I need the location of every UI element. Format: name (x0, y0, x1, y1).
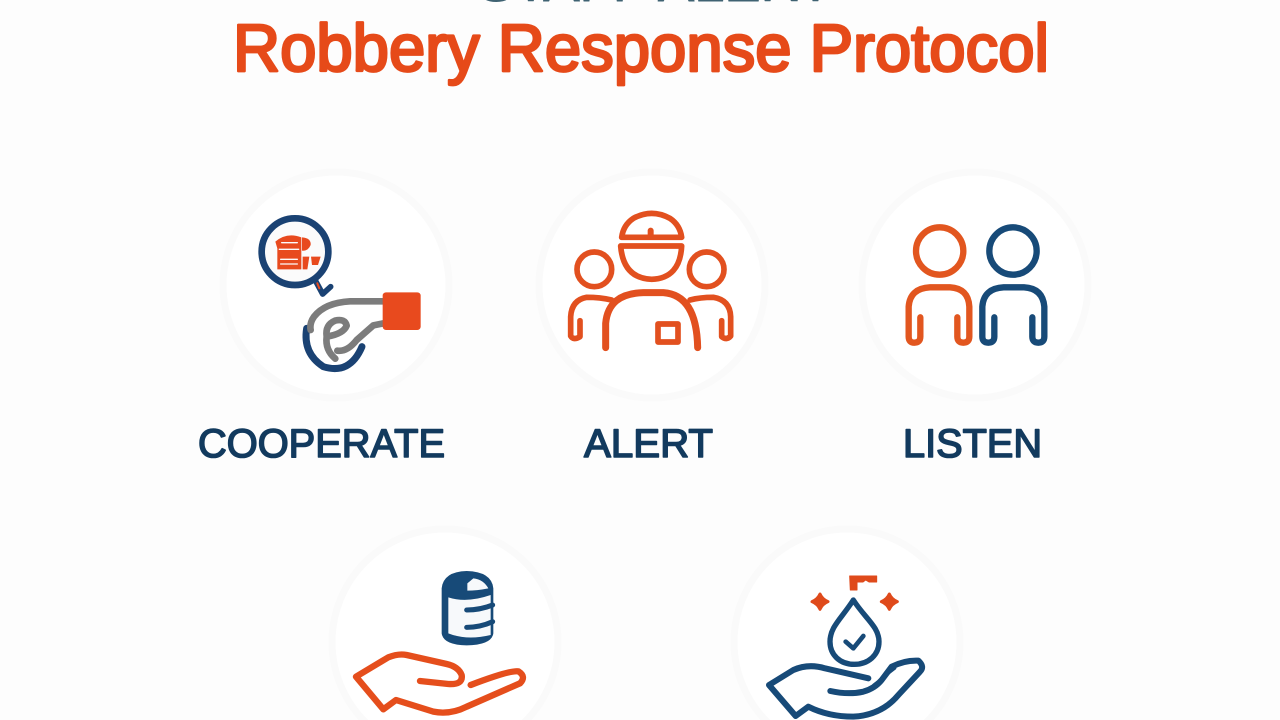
icon circle: wash hands (734, 529, 960, 720)
label: listen: LISTEN (903, 422, 1042, 466)
panel: cooperate (223, 172, 449, 398)
icon circle: hand over valuables (332, 529, 558, 720)
panel: listen (862, 172, 1088, 398)
icon: two people (909, 227, 1044, 343)
panel: wash hands (734, 529, 960, 720)
label: alert: ALERT (584, 422, 713, 466)
panel: hand over valuables (332, 529, 558, 720)
icon: group with guard (571, 213, 731, 348)
icon circle: cooperate (223, 172, 449, 398)
icon: magnifier and handing over hand (262, 218, 421, 369)
icon circle: listen (862, 172, 1088, 398)
title: Robbery Response Protocol (233, 11, 1049, 86)
icon: drop above open hand (769, 576, 922, 717)
icon circle: alert (539, 172, 765, 398)
panel: alert (539, 172, 765, 398)
label: cooperate: COOPERATE (198, 422, 445, 466)
icon: item above open hand (356, 571, 523, 713)
